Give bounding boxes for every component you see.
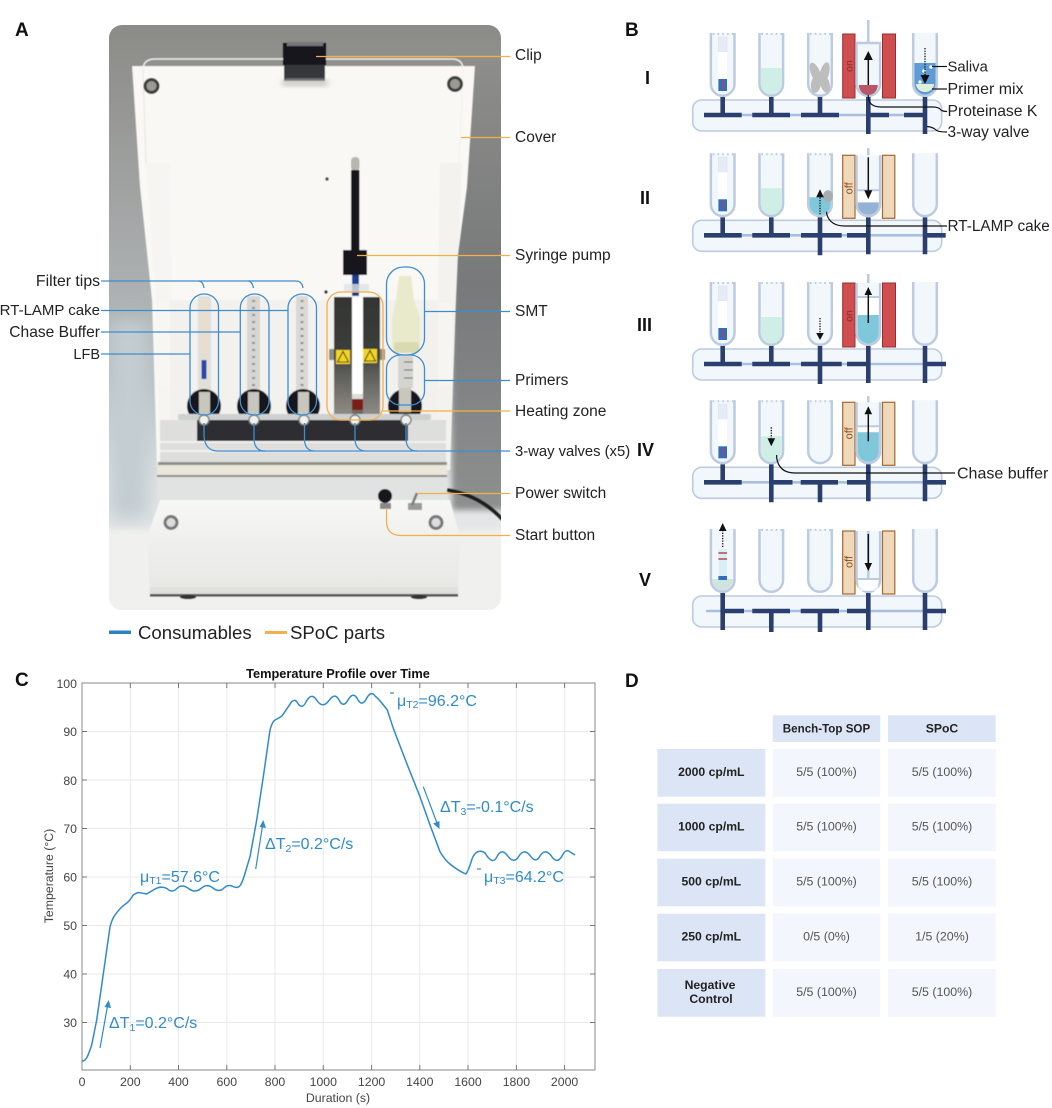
- labels for panel A, right side: SMT: [515, 303, 548, 320]
- row III: III: [637, 315, 652, 335]
- row I: Primer mix: [948, 81, 1023, 98]
- annotation: ramp 3: =-0.1°C/s: [466, 799, 534, 816]
- row: 250 cp/mL: 0/5 (0%): [803, 930, 850, 944]
- y axis ticks: 40: [63, 968, 77, 982]
- column headers: SPoC: [926, 722, 958, 736]
- x axis ticks: [79, 1075, 578, 1089]
- row I: [645, 20, 1038, 141]
- labels for panel A, left side: [0, 273, 100, 363]
- annotation: mean T3: μ: [484, 869, 493, 886]
- row IV: Chase buffer: [957, 466, 1049, 482]
- x axis ticks: 2000: [551, 1075, 578, 1089]
- panel label C: C: [15, 670, 29, 691]
- power cable: [447, 490, 503, 520]
- heating zone outline: [327, 292, 383, 420]
- row I: 3-way valve: [948, 124, 1029, 141]
- row: 1000 cp/mL: [657, 804, 996, 851]
- y axis ticks: 50: [63, 919, 77, 933]
- row III: on: [844, 310, 856, 322]
- row V: off: [844, 555, 856, 568]
- legend: SPoC parts: [290, 622, 385, 643]
- x axis ticks: 200: [120, 1075, 141, 1089]
- row I: I: [645, 68, 650, 88]
- annotation: mean T2: T2: [406, 699, 419, 711]
- legend: [109, 622, 385, 643]
- row: negative control: Negative: [685, 978, 736, 992]
- labels for panel A, right side: Heating zone: [515, 403, 606, 420]
- x axis ticks: 0: [79, 1075, 86, 1089]
- labels for panel A, left side: RT-LAMP cake: [0, 302, 100, 319]
- annotation: ramp 3: ΔT: [440, 799, 460, 816]
- panel label B: B: [625, 20, 639, 41]
- row: negative control: Control: [689, 992, 733, 1006]
- row: 2000 cp/mL: 5/5 (100%): [796, 765, 857, 779]
- row I: Saliva: [948, 60, 989, 76]
- annotation: ramp 1: [100, 1000, 197, 1048]
- annotation: ramp 2: [256, 820, 353, 869]
- labels for panel A, right side: Syringe pump: [515, 247, 611, 264]
- row: 250 cp/mL: [657, 914, 996, 961]
- annotation: ramp 1: =0.2°C/s: [135, 1015, 197, 1032]
- row: 1000 cp/mL: 5/5 (100%): [796, 820, 857, 834]
- row V: V: [639, 570, 651, 590]
- y axis ticks: 60: [63, 870, 77, 884]
- x axis ticks: 1600: [454, 1075, 482, 1089]
- x axis ticks: 1400: [406, 1075, 434, 1089]
- annotation: ramp 3: 3: [460, 806, 466, 818]
- annotation: mean T1: μ: [140, 869, 149, 886]
- row: negative control: [657, 969, 996, 1017]
- x axis ticks: 1200: [358, 1075, 385, 1089]
- annotation: ramp 1: 1: [129, 1022, 135, 1034]
- housing body: [132, 66, 475, 500]
- row I: Proteinase K: [948, 103, 1038, 120]
- labels for panel A, right side: 3-way valves (x5): [515, 444, 630, 460]
- labels for panel A, right side: Power switch: [515, 485, 606, 502]
- annotation: mean T1: T1: [149, 875, 162, 887]
- labels for panel A, right side: [515, 47, 630, 544]
- consumable outlines: tips, SMT, primers: [190, 267, 424, 415]
- axis titles: Duration (s): [306, 1091, 370, 1105]
- chart title: Temperature Profile over Time: [246, 666, 430, 681]
- row IV: IV: [637, 440, 654, 460]
- temperature curve: [82, 694, 575, 1061]
- row: 2000 cp/mL: 2000 cp/mL: [678, 765, 745, 779]
- tip tubes: [198, 296, 211, 401]
- row: negative control: 5/5 (100%): [912, 985, 972, 999]
- y axis ticks: 70: [63, 822, 77, 836]
- column headers: [773, 715, 996, 742]
- annotation: ramp 3: [423, 787, 534, 829]
- y axis ticks: [56, 677, 77, 1030]
- row: 500 cp/mL: 500 cp/mL: [681, 874, 742, 888]
- acrylic front and manifold: [160, 420, 446, 465]
- panel C: temperature chart: [42, 666, 595, 1105]
- labels for panel A, right side: Clip: [515, 47, 542, 64]
- annotation: mean T1: =57.6°C: [161, 869, 220, 886]
- row V: [639, 523, 946, 632]
- y axis ticks: 30: [63, 1016, 77, 1030]
- annotation: mean T2: =96.2°C: [418, 693, 477, 710]
- SMT and primer tube: [392, 276, 420, 353]
- annotation: ramp 2: =0.2°C/s: [291, 836, 353, 853]
- x axis ticks: 1000: [310, 1075, 337, 1089]
- heating block: [334, 297, 352, 415]
- row I: on: [844, 60, 856, 72]
- annotation: ramp 1: ΔT: [109, 1015, 129, 1032]
- clip hardware: [284, 64, 325, 81]
- consumable leader lines: [101, 281, 510, 451]
- syringe rod: [351, 157, 360, 171]
- row II: RT-LAMP cake: [948, 218, 1050, 235]
- legend: Consumables: [138, 622, 252, 643]
- labels for panel A, left side: LFB: [73, 347, 100, 363]
- screws: [144, 78, 160, 94]
- row: 1000 cp/mL: 1000 cp/mL: [678, 820, 745, 834]
- row: 1000 cp/mL: 5/5 (100%): [912, 820, 972, 834]
- annotation: ramp 2: 2: [285, 843, 291, 855]
- annotation: mean T3: T3: [493, 875, 506, 887]
- panel A: device photo: [100, 25, 522, 620]
- row: 250 cp/mL: 250 cp/mL: [681, 930, 742, 944]
- row: 500 cp/mL: 5/5 (100%): [796, 874, 857, 888]
- valve mounts: [186, 388, 222, 415]
- labels for panel A, right side: Primers: [515, 372, 569, 389]
- row IV: off: [844, 426, 856, 439]
- y axis ticks: 80: [63, 774, 77, 788]
- row II: off: [844, 181, 856, 194]
- x axis ticks: 800: [265, 1075, 285, 1089]
- annotation: mean T3: =64.2°C: [505, 869, 564, 886]
- base: [147, 500, 460, 595]
- panel C: temperature chart: Temperature (°C): [42, 829, 56, 923]
- row III: [637, 274, 946, 384]
- panel label D: D: [625, 671, 639, 692]
- labels for panel A, right side: Start button: [515, 527, 595, 544]
- row II: [640, 148, 1050, 255]
- row: negative control: 5/5 (100%): [796, 985, 857, 999]
- x axis ticks: 1800: [503, 1075, 530, 1089]
- row II: II: [640, 188, 650, 208]
- y axis ticks: 90: [63, 725, 77, 739]
- annotation: mean T2: [390, 693, 477, 711]
- panel label A: A: [15, 20, 29, 41]
- annotation: mean T3: [477, 869, 564, 887]
- labels for panel A, right side: Cover: [515, 129, 556, 146]
- labels for panel A, left side: Chase Buffer: [9, 324, 100, 341]
- labels for panel A, left side: Filter tips: [36, 273, 100, 290]
- row: 250 cp/mL: 1/5 (20%): [915, 930, 969, 944]
- y axis ticks: 100: [56, 677, 77, 691]
- SPoC part leader lines: [316, 56, 510, 536]
- row: 500 cp/mL: 5/5 (100%): [912, 874, 972, 888]
- x axis ticks: 600: [217, 1075, 237, 1089]
- row: 2000 cp/mL: [657, 749, 996, 797]
- x axis ticks: 400: [168, 1075, 189, 1089]
- annotation: ramp 2: ΔT: [265, 836, 285, 853]
- row: 500 cp/mL: [657, 859, 996, 906]
- row IV: [637, 396, 1049, 502]
- annotation: mean T2: μ: [397, 693, 406, 710]
- column headers: Bench-Top SOP: [783, 722, 870, 736]
- row: 2000 cp/mL: 5/5 (100%): [912, 765, 972, 779]
- panel D: results table: [657, 715, 996, 1017]
